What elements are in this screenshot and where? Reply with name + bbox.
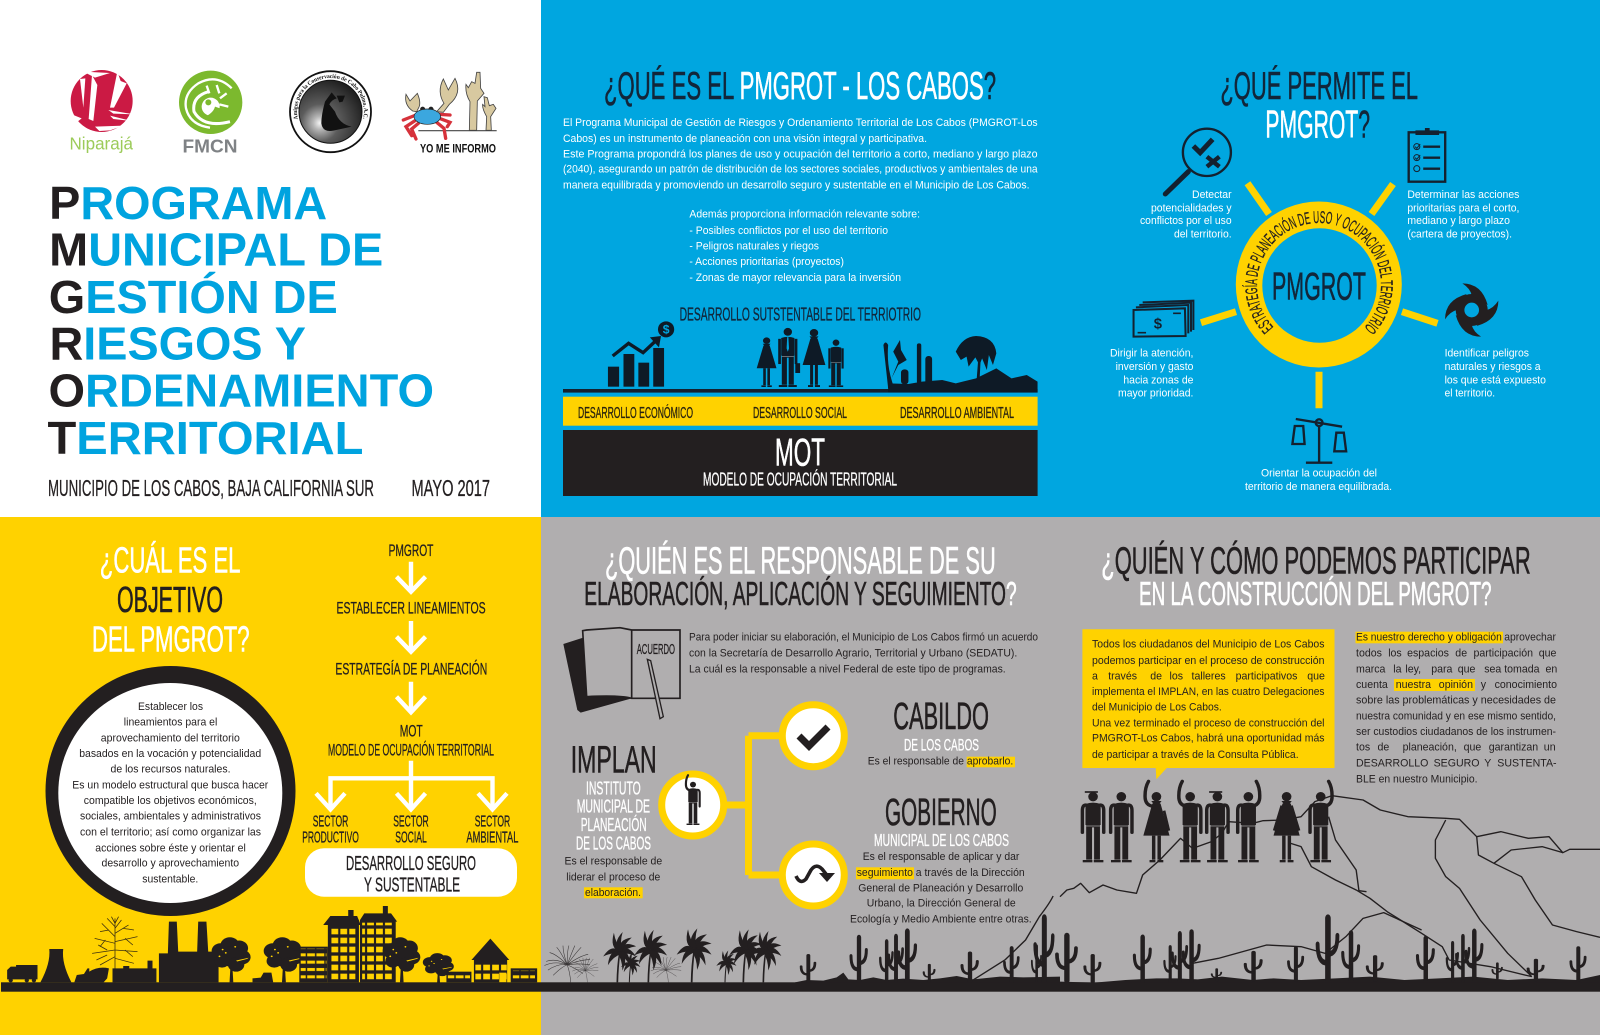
mountain outlines [970,796,1600,982]
icon: family [757,328,844,387]
heading: OBJETIVO [117,579,223,620]
callout: todos los ciudadanos: PMGROT-Los Cabos, habrá una oportunidad más [1092,733,1324,745]
heading: ¿QUÉ PERMITE EL [1220,65,1418,108]
text: identificar [1445,348,1546,400]
title: PROGRAMA [49,177,327,229]
text: derecho y obligación: sea [1484,663,1501,675]
list: información relevante: - Acciones prioritarias (proyectos) [689,256,844,268]
heading [1101,540,1531,613]
text: acuerdo [689,632,1038,675]
apartments [299,947,328,982]
icon: acuerdo book: ACUERDO [637,642,675,658]
intro paragraph: El Programa Municipal de Gestión de Riesgos y Ordenamiento Territorial de Los Cabos (PMGROT-Los [563,117,1038,129]
heading: DEL PMGROT? [92,618,250,660]
truck [7,965,37,979]
text: derecho y obligación: los [1388,648,1402,660]
pill: desarrollo seguro: DESARROLLO SEGURO [346,853,476,875]
text: derecho y obligación: que [1458,663,1475,675]
pill: desarrollo seguro: Y SUSTENTABLE [364,875,460,897]
callout: todos los ciudadanos: implementa el IMPLAN, en las cuatro Delegaciones [1092,686,1324,698]
text: derecho y obligación: nuestra [1396,679,1431,691]
block: implan: MUNICIPAL DE [577,796,650,817]
block: implan: INSTITUTO [586,777,641,798]
flow steps: MODELO DE OCUPACIÓN TERRITORIAL [328,741,494,760]
bar: desarrollo pillars: DESARROLLO AMBIENTAL [900,405,1014,422]
box: MOT: MODELO DE OCUPACIÓN TERRITORIAL [703,469,897,490]
ground strip [1,982,1600,992]
block: gobierno: Urbano, la Dirección General de [867,898,1016,910]
sector labels: PRODUCTIVO [302,830,359,847]
title: ORDENAMIENTO [48,365,434,417]
block: gobierno: seguimiento a través de la Dirección [857,867,1025,879]
text: derecho y obligación: BLE en nuestro Municipio. [1356,773,1478,785]
block: implan: PLANEACIÓN [581,814,647,835]
block: gobierno: General de Planeación y Desarrollo [858,883,1023,895]
circle: objetivo text: lineamientos para el [124,717,217,729]
intro paragraph: Cabos) es un instrumento de planeación con una visión integral y participativa. [563,133,927,145]
palms and desert left [544,918,1060,983]
text: determinar: (cartera de proyectos). [1407,228,1512,240]
text: derecho y obligación: Y [1484,758,1491,770]
text: derecho y obligación: de [1378,742,1389,754]
block: implan: DE LOS CABOS [576,832,651,853]
circle: objetivo text: acciones sobre éste y orientar el [95,842,246,854]
text: orientar [1245,468,1392,493]
callout: todos los ciudadanos: podemos participar en el proceso de construcción [1092,655,1325,667]
icon: clipboard [1409,128,1445,182]
block: implan: elaboración. [585,887,641,899]
text: dirigir: inversión y gasto [1116,361,1194,373]
trees [212,937,251,982]
block: implan: IMPLAN [571,740,657,782]
callout: todos los ciudadanos: a [1092,670,1098,682]
text: derecho y obligación: conocimiento [1495,679,1557,691]
title: RIESGOS Y [50,318,306,370]
intro paragraph: Este Programa propondrá los planes de uso y ocupación del territorio a corto, mediano y largo plazo [563,148,1038,160]
intro paragraph: manera equilibrada y promoviendo un desarrollo seguro y sustentable en el Municipio de Los Cabos. [563,180,1030,192]
heading [92,540,250,660]
block: cabildo: Es el responsable de aprobarlo. [868,755,1013,767]
ring: estrategia: ESTRATEGÍA DE PLANEACIÓN DE USO Y OCUPACIÓN DEL TERRIOTRIO [1242,211,1393,335]
icon: scales [1292,419,1346,463]
title: GESTIÓN DE [49,271,338,323]
text: detectar: del territorio. [1174,228,1232,240]
circle: objetivo text: con el territorio; así como organizar las [80,827,261,839]
flow diagram [302,541,519,897]
panel: blue background [541,0,1600,517]
block: gobierno: GOBIERNO [885,792,997,834]
connector lines [727,736,785,875]
panel: responsable [563,540,1038,926]
panel: objetivo [0,517,541,1035]
text: identificar: Identificar peligros [1445,348,1529,360]
text: derecho y obligación: tomada [1504,663,1540,675]
callout: todos los ciudadanos: talleres [1192,670,1226,682]
text: derecho y obligación: SUSTENTA- [1497,758,1557,770]
logo: Niparajá [70,70,134,153]
text: derecho y obligación: participación [1474,648,1533,660]
subtitle: municipality: MUNICIPIO DE LOS CABOS, BAJA CALIFORNIA SUR [48,475,374,501]
house [471,939,509,982]
heading [584,540,1017,613]
panel: qué permite el PMGROT [1110,65,1546,493]
icon: growth chart: $ [663,323,670,337]
callout: todos los ciudadanos: de participar a través de la Consulta Pública. [1092,749,1299,761]
sector labels: SECTOR [475,814,510,831]
block: gobierno: Es el responsable de aplicar y dar [863,851,1020,863]
text: determinar: mediano y largo plazo [1407,215,1510,227]
circle: objetivo text: aprovechamiento del territorio [101,733,240,745]
flow steps: ESTRATEGÍA DE PLANEACIÓN [335,660,487,678]
text: determinar [1407,189,1519,240]
circle: objetivo text: de los recursos naturales. [110,764,230,776]
list: información relevante [689,209,920,284]
flow steps: MOT [400,722,423,741]
text: derecho y obligación: SEGURO [1434,758,1480,770]
block: cabildo: CABILDO [893,696,989,738]
text: acuerdo: Para poder iniciar su elaboración, el Municipio de Los Cabos firmó un acuerdo [689,632,1038,644]
flow arrows [316,562,507,809]
sector labels: SECTOR [393,814,429,831]
text: derecho y obligación: opinión [1439,679,1473,691]
flow steps [328,541,494,760]
text: derecho y obligación: un [1544,742,1556,754]
list: información relevante: Además proporciona información relevante sobre: [689,209,920,221]
cement truck [74,968,109,982]
text: derecho y obligación: en [1546,663,1557,675]
flow steps: PMGROT [389,541,433,560]
icon: growth chart [608,321,674,387]
text: derecho y obligación: DESARROLLO [1356,758,1428,770]
text: derecho y obligación [1356,632,1557,785]
text: dirigir: hacia zonas de [1123,374,1194,386]
title [48,177,434,464]
low building two [446,972,471,982]
sector labels: SOCIAL [395,830,427,847]
heading: ¿CUÁL ES EL [100,540,240,580]
callout: todos los ciudadanos: Todos los ciudadanos del Municipio de Los Cabos [1092,638,1324,650]
callout: todos los ciudadanos: los [1170,670,1183,682]
callout: todos los ciudadanos: de [1150,670,1162,682]
circle: objetivo text: basados en la vocación y potencialidad [79,748,261,760]
text: detectar: conflictos por el uso [1140,215,1232,227]
rays [1201,183,1438,408]
icon: magnifier [1165,129,1231,194]
heading: PMGROT? [1265,104,1370,146]
block: implan: liderar el proceso de [566,872,660,884]
text: dirigir [1110,348,1194,400]
text: derecho y obligación: que [1464,742,1481,754]
sector labels [302,814,519,847]
tower two [360,906,397,982]
text: derecho y obligación: nuestra comunidad y en ese mismo sentido, [1356,710,1556,722]
heading: ¿QUIÉN ES EL RESPONSABLE DE SU [605,540,996,582]
text: derecho y obligación: y [1481,679,1487,691]
circle: objetivo text: Establecer los [138,701,203,713]
block: gobierno [850,792,1032,926]
low building three [511,968,537,982]
block: cabildo [868,696,1015,767]
text: orientar: territorio de manera equilibrada. [1245,481,1392,493]
circle: objetivo text: Es un modelo estructural que busca hacer [72,780,269,792]
panel: qué es el PMGROT [563,65,1038,496]
text: derecho y obligación: cuenta [1356,679,1388,691]
circle: objetivo text: sustentable. [142,874,198,886]
logo: Amigos para la Conservación de Cabo Pulmo: Amigos para la Conservación de Cabo Pulmo, A.C. [292,74,368,120]
text: derecho y obligación: espacios [1407,648,1449,660]
circle: objetivo text [46,666,296,916]
text: identificar: el territorio. [1445,388,1495,400]
ground line [563,389,1038,393]
callout: todos los ciudadanos: Una vez terminado el proceso de construcción del [1092,717,1324,729]
callout: todos los ciudadanos: través [1108,670,1137,682]
icon: money: $ [1154,316,1162,332]
callout: todos los ciudadanos: participativos [1236,670,1297,682]
bar: desarrollo pillars: DESARROLLO SOCIAL [753,405,847,422]
block: cabildo: DE LOS CABOS [904,737,979,755]
block: implan: Es el responsable de [564,855,662,867]
circle: objetivo text: desarrollo y aprovechamiento [102,858,239,870]
list: información relevante: - Peligros naturales y riegos [689,240,819,252]
logo: Yo me informo [403,72,497,156]
logo: Amigos para la Conservación de Cabo Pulmo [289,70,372,154]
text: dirigir: Dirigir la atención, [1110,348,1193,360]
logo: Niparajá: Niparajá [70,133,133,153]
callout: todos los ciudadanos [1082,629,1334,779]
box: MOT [563,430,1038,496]
block: gobierno: MUNICIPAL DE LOS CABOS [874,830,1009,850]
text: derecho y obligación: planeación, [1403,742,1457,754]
text: derecho y obligación: aprovechar [1504,632,1556,644]
text: dirigir: mayor prioridad. [1118,388,1193,400]
callout: todos los ciudadanos: del Municipio de Los Cabos. [1092,702,1222,714]
pill: desarrollo seguro [305,848,517,897]
text: derecho y obligación: marca [1356,663,1386,675]
node: cabildo icon [782,705,844,767]
text: orientar: Orientar la ocupación del [1261,468,1377,480]
text: derecho y obligación: Es nuestro derecho y obligación [1356,632,1502,644]
callout: todos los ciudadanos: que [1307,670,1325,682]
text: detectar [1140,189,1232,240]
panel: participar [1082,540,1557,862]
panel: grey background [541,517,1600,1035]
text: derecho y obligación: para [1431,663,1453,675]
bar: desarrollo pillars [563,397,1038,426]
heading: ¿QUÉ ES EL PMGROT - LOS CABOS? [604,65,996,108]
low building [112,961,156,982]
people row [1082,781,1332,862]
node: implan icon [662,774,724,836]
text: detectar: potencialidades y [1151,202,1232,214]
cooling tower [40,949,71,982]
circle: objetivo text: sociales, ambientales y administrativos [80,811,261,823]
circle: objetivo text: compatible los objetivos económicos, [84,795,257,807]
block: gobierno: Ecología y Medio Ambiente entre otras. [850,914,1032,926]
bare tree [92,917,137,982]
title: TERRITORIAL [48,412,364,464]
sector labels: SECTOR [313,814,348,831]
text: identificar: los que está expuesto [1445,374,1546,386]
tower one [328,910,359,982]
icon: money [1134,301,1193,337]
intro paragraph: (2040), asegurando un patrón de distribución de los sectores sociales, productivos y ambientales de una [563,164,1038,176]
box: MOT: MOT [775,432,825,475]
text: determinar: Determinar las acciones [1407,189,1519,201]
node: gobierno icon [782,844,844,906]
date: MAYO 2017 [412,475,490,501]
logo: Yo me informo: YO ME INFORMO [420,142,496,156]
desert right [1057,918,1600,983]
text: detectar: Detectar [1192,189,1232,201]
text: acuerdo: La cuál es la responsable a nivel Federal de este tipo de programas. [689,663,1006,675]
sector labels: AMBIENTAL [466,830,519,847]
factory [159,922,219,982]
bar: desarrollo pillars: DESARROLLO ECONÓMICO [578,405,693,422]
heading: ELABORACIÓN, APLICACIÓN Y SEGUIMIENTO? [584,575,1017,613]
ring: estrategia: PMGROT [1272,265,1366,308]
text: derecho y obligación: garantizan [1489,742,1538,754]
text: determinar: prioritarias para el corto, [1407,202,1519,214]
text: derecho y obligación: tos [1356,742,1370,754]
block: implan [564,740,662,899]
text: derecho y obligación: que [1539,648,1556,660]
title: MUNICIPAL DE [49,224,383,276]
list: información relevante: - Zonas de mayor relevancia para la inversión [689,272,901,284]
list: información relevante: - Posibles conflictos por el uso del territorio [689,225,888,237]
intro paragraph [563,117,1038,192]
icon: cyclone [1445,283,1498,337]
logo: FMCN [179,71,242,157]
text: identificar: naturales y riesgos a [1445,361,1541,373]
text: derecho y obligación: ley, [1405,663,1421,675]
icon: acuerdo book [563,628,680,719]
text: derecho y obligación: ser custodios ciudadanos de los instrumen- [1356,726,1556,738]
panel: title and logos [48,70,497,501]
subheading: desarrollo sustentable: DESARROLLO SUTSTENTABLE DEL TERRIOTRIO [680,304,921,325]
text: derecho y obligación: todos [1356,648,1382,660]
text: acuerdo: con la Secretaría de Desarrollo Agrario, Territorial y Urbano (SEDATU). [689,648,1017,660]
text: derecho y obligación: de [1455,648,1467,660]
city skyline [7,906,537,983]
flow steps: ESTABLECER LINEAMIENTOS [336,598,486,618]
logo: FMCN: FMCN [182,136,238,157]
text: derecho y obligación: la [1393,663,1402,675]
text: derecho y obligación: sobre las problemáticas y necesidades de [1356,694,1556,706]
heading [1220,65,1418,146]
car [252,973,273,982]
icon: landscape [883,336,1038,392]
